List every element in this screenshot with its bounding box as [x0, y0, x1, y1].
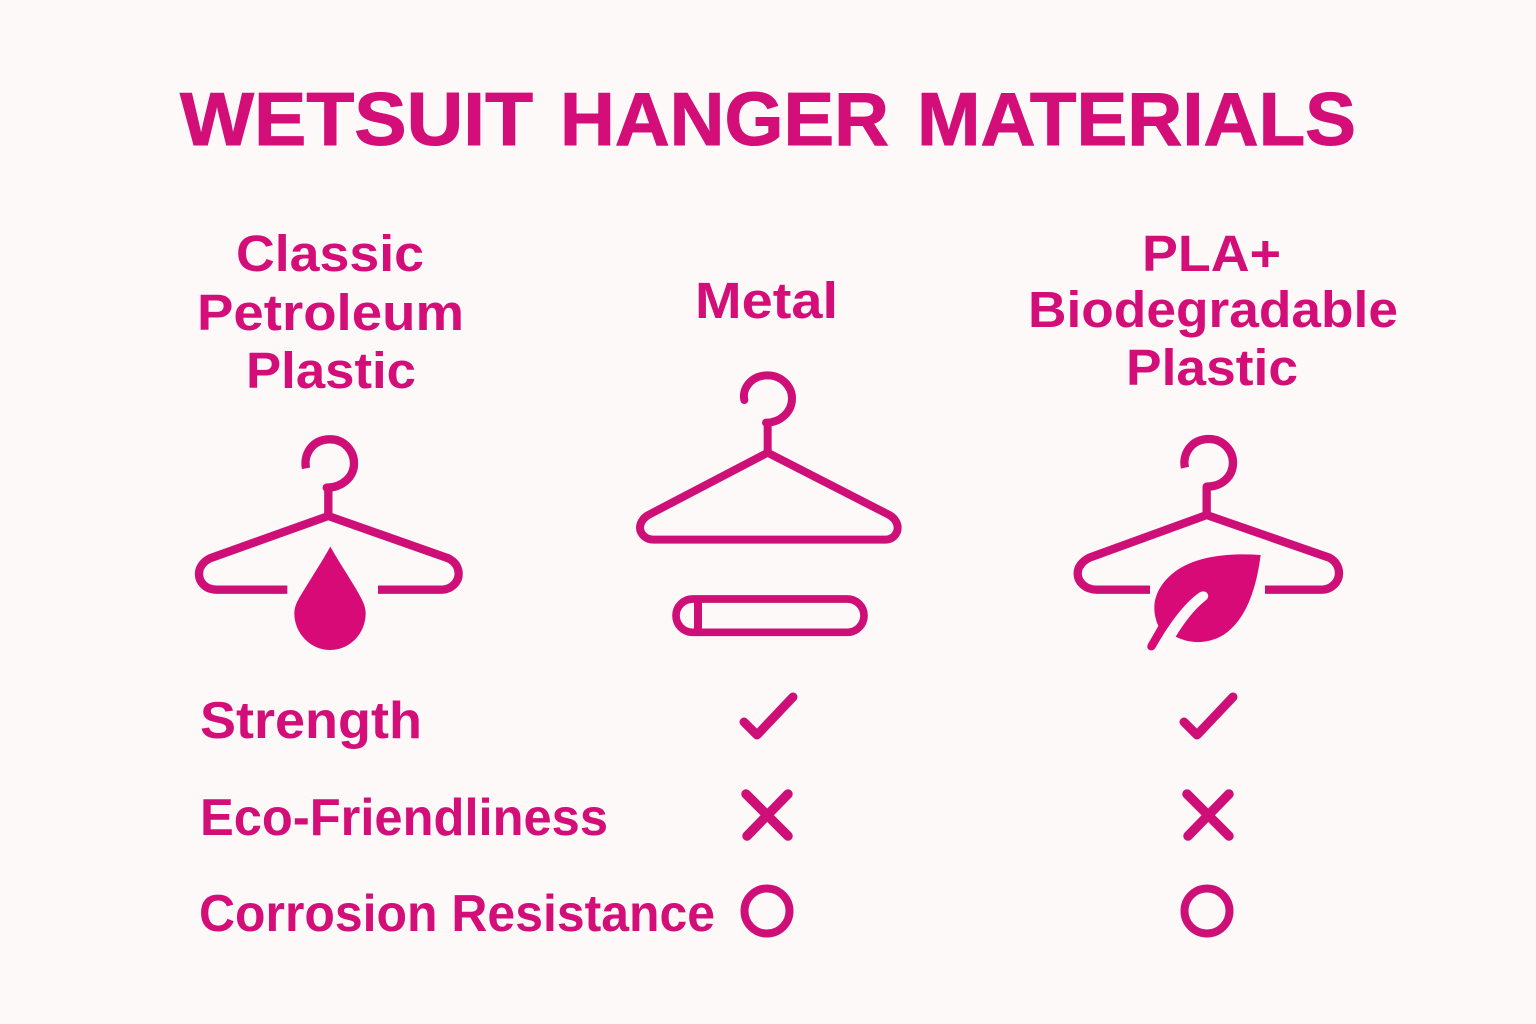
- panel: comparison rows: [199, 692, 1233, 943]
- icon: metal strength check: [744, 697, 793, 735]
- panel: metal: [640, 272, 898, 632]
- heading: PLA+ biodegradable plastic: Biodegradable: [1028, 281, 1398, 338]
- heading: PLA+ biodegradable plastic: Plastic: [1126, 339, 1298, 396]
- heading: PLA+ biodegradable plastic: PLA+: [1142, 225, 1281, 282]
- heading: classic petroleum plastic: [197, 225, 464, 399]
- panel: classic petroleum plastic: [197, 225, 464, 650]
- heading: metal: Metal: [695, 272, 838, 329]
- heading: PLA+ biodegradable plastic: [1028, 225, 1398, 396]
- icon: PLA+ eco-friendliness cross: [1187, 794, 1229, 836]
- icon: biodegradable hanger with leaf: [1078, 439, 1339, 650]
- row label: corrosion resistance: Corrosion Resistance: [199, 885, 715, 943]
- icon: metal bar: [676, 599, 864, 632]
- title: HANGER: [560, 77, 889, 161]
- icon: metal eco-friendliness cross: [746, 794, 788, 836]
- heading: classic petroleum plastic: Plastic: [246, 342, 416, 399]
- icon: PLA+ strength check: [1184, 697, 1233, 735]
- panel: PLA+ biodegradable plastic: [1028, 225, 1398, 650]
- title: [180, 77, 1356, 161]
- icon: metal hanger with bar: [640, 375, 898, 632]
- title: MATERIALS: [917, 77, 1356, 161]
- icon: plastic hanger with oil drop: [199, 439, 459, 650]
- heading: classic petroleum plastic: Petroleum: [197, 284, 464, 341]
- heading: classic petroleum plastic: Classic: [236, 225, 424, 282]
- row label: strength: Strength: [200, 692, 422, 750]
- icon: metal corrosion resistance circle: [744, 888, 790, 934]
- title: WETSUIT: [180, 77, 533, 161]
- icon: leaf: [1147, 554, 1261, 650]
- row label: eco-friendliness: Eco-Friendliness: [200, 789, 608, 847]
- icon: PLA+ corrosion resistance circle: [1184, 888, 1230, 934]
- icon: oil drop: [294, 547, 366, 650]
